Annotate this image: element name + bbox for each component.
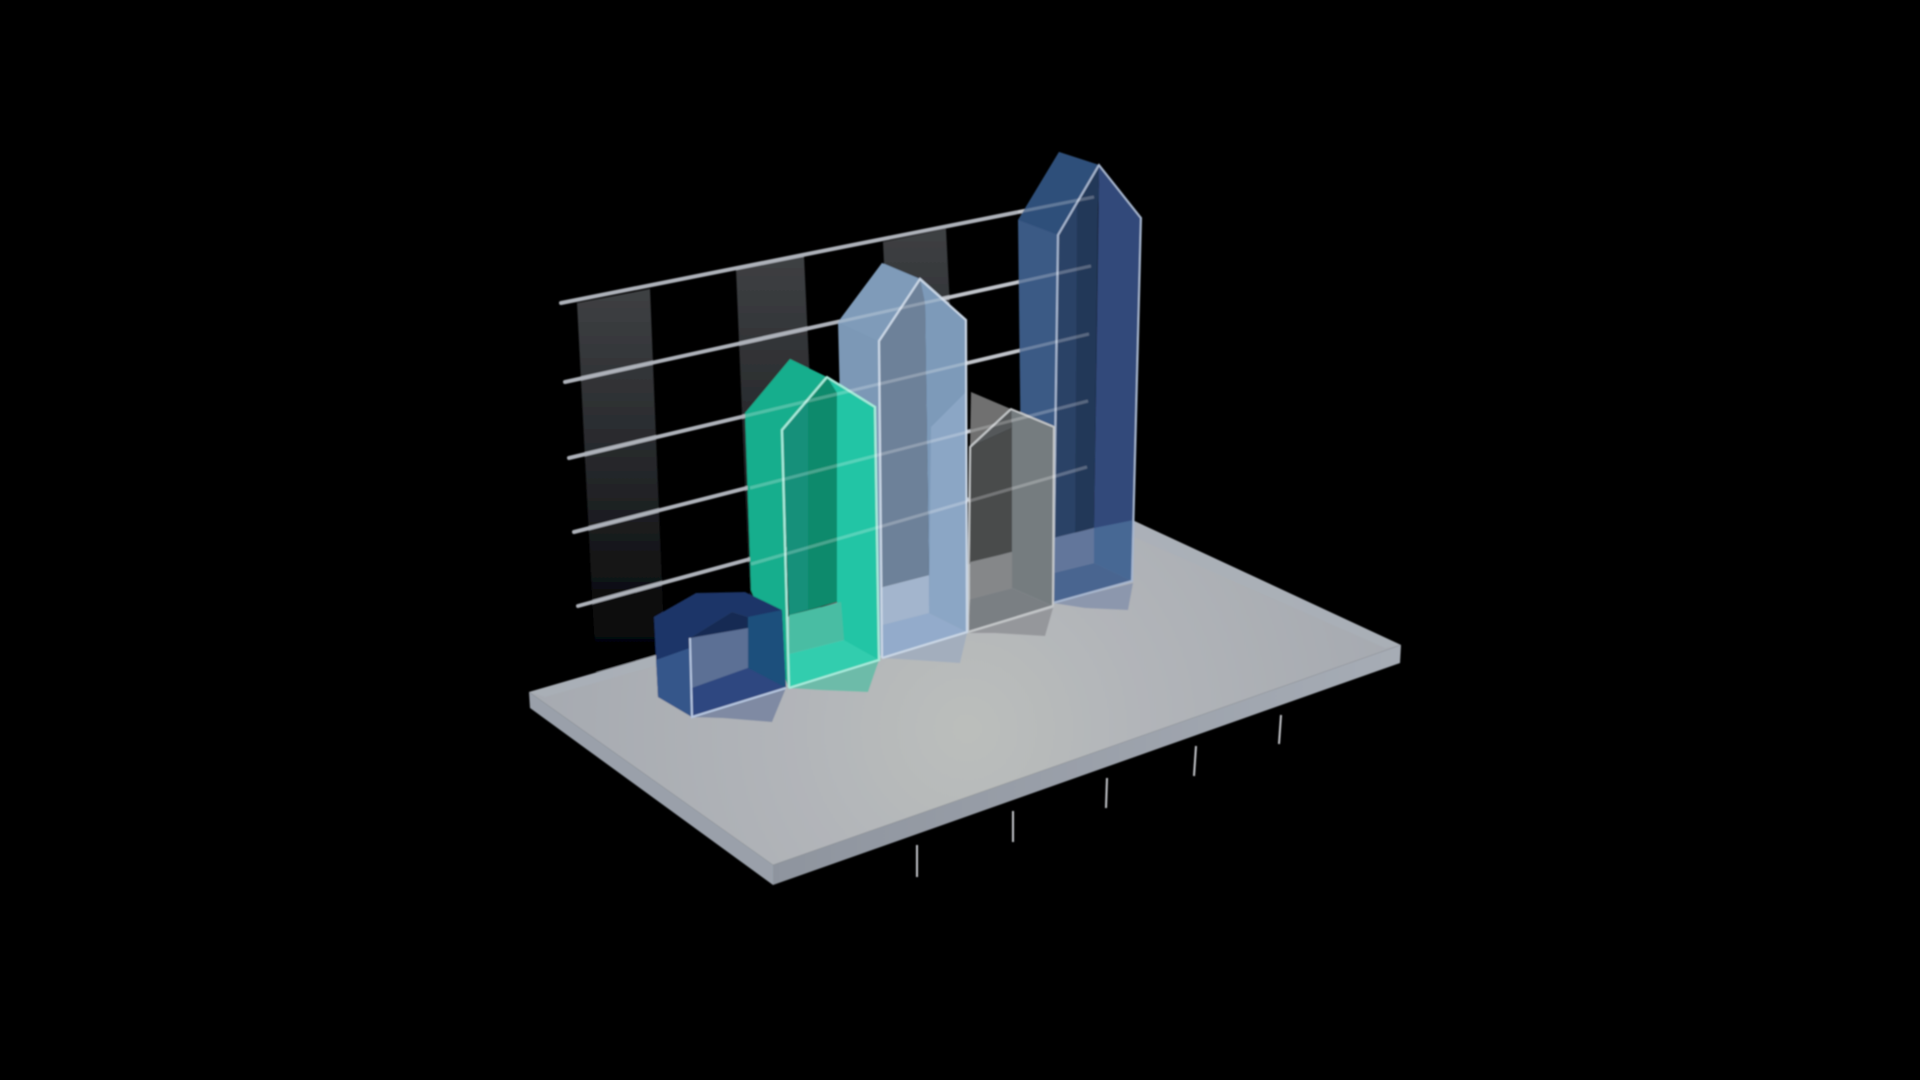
back wall grid lines	[561, 197, 1094, 606]
bar: gray	[968, 392, 1054, 632]
back wall column strips	[577, 229, 965, 672]
bar: green	[745, 359, 879, 688]
bar: light blue	[838, 263, 967, 658]
bar: short navy	[654, 592, 786, 717]
bar shadows on platform	[692, 583, 1133, 722]
grid lines seen through bars	[745, 197, 1094, 564]
gray bar left side seen over light blue	[929, 392, 967, 632]
bar: tall dark blue	[1018, 152, 1141, 603]
chart group	[529, 152, 1401, 885]
tick marks	[917, 715, 1281, 877]
platform	[529, 518, 1401, 885]
